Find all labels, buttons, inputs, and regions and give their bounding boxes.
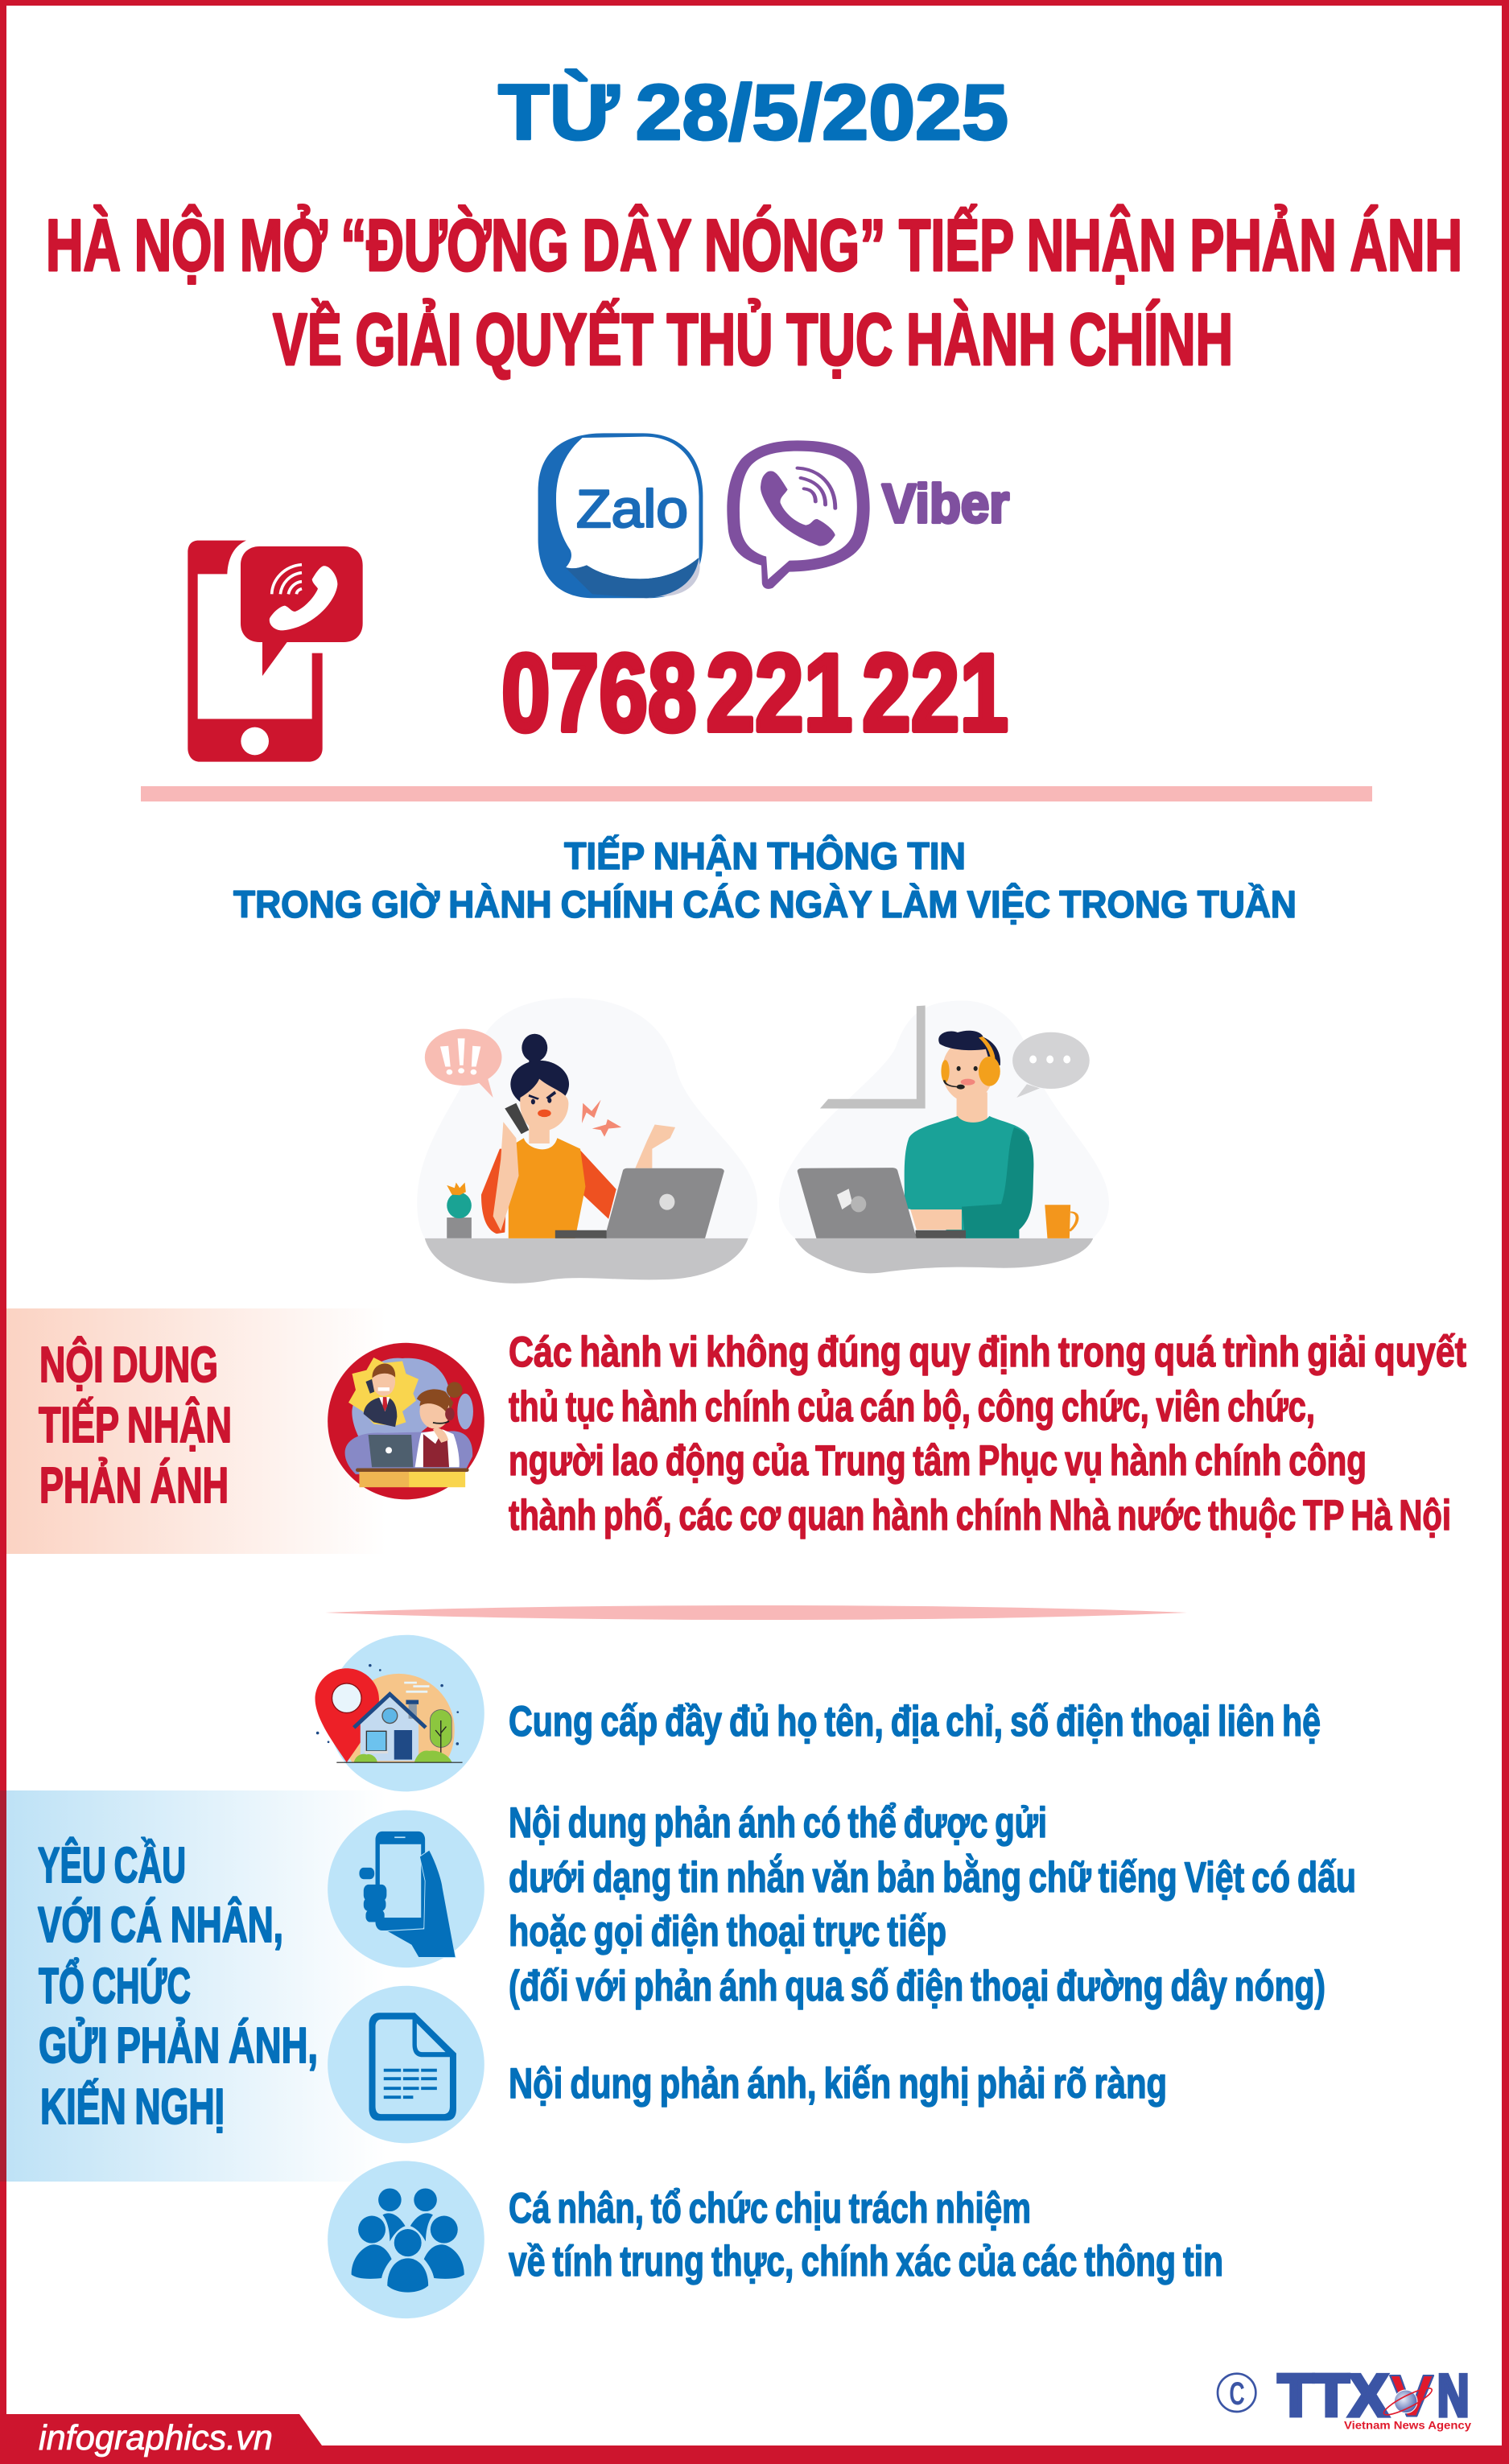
- logo: TTXVN: [1218, 2363, 1471, 2431]
- site name: infographics.vn: [39, 2418, 273, 2458]
- heading: TỔ CHỨC: [39, 1958, 191, 2014]
- logo: TTXVN: N: [1437, 2363, 1469, 2429]
- text: hình thức gửi: [509, 1799, 1356, 2010]
- subtitle: TRONG GIỜ HÀNH CHÍNH CÁC NGÀY LÀM VIỆC TRONG TUẦN: [233, 883, 1297, 925]
- footer band with site tab: [0, 2414, 1509, 2464]
- panel background: [6, 1790, 386, 2182]
- logo: TTXVN: Vietnam News Agency: [1344, 2418, 1471, 2431]
- main title: [46, 204, 1462, 381]
- heading: GỬI PHẢN ÁNH,: [39, 2018, 318, 2074]
- text: rõ ràng: Nội dung phản ánh, kiến nghị phải rõ ràng: [509, 2060, 1167, 2108]
- copyright mark: [1218, 2374, 1255, 2412]
- text: nội dung: [509, 1329, 1466, 1539]
- text: trách nhiệm: [509, 2185, 1223, 2285]
- icon: Zalo logo: Zalo: [576, 479, 688, 538]
- copyright mark: C: [1229, 2376, 1245, 2412]
- pink divider bar: [141, 786, 1372, 801]
- panel: nội dung tiếp nhận phản ánh: [6, 1308, 1466, 1554]
- hotline number: 0768 221 221: [501, 632, 1008, 755]
- heading: PHẢN ÁNH: [39, 1458, 229, 1514]
- heading: [39, 1337, 232, 1514]
- heading: YÊU CẦU: [38, 1838, 186, 1893]
- illustration: operator with headset: [779, 1001, 1109, 1273]
- panel: yêu cầu: [0, 1635, 1356, 2318]
- icon: house with location pin: [315, 1635, 484, 1791]
- icon: group of people: [328, 2161, 484, 2318]
- heading: NỘI DUNG: [39, 1337, 218, 1393]
- pink tapered divider: [325, 1605, 1187, 1620]
- icon: Viber logo: [727, 440, 1009, 589]
- heading: TIẾP NHẬN: [39, 1398, 232, 1453]
- logo: TTXVN: TTX: [1278, 2363, 1388, 2429]
- title date: TỪ 28/5/2025: [498, 68, 1008, 156]
- heading: KIẾN NGHỊ: [40, 2079, 225, 2135]
- icon: Viber logo: Viber: [882, 473, 1009, 534]
- heading: [38, 1838, 318, 2135]
- illustration: customer calling and operator: [417, 998, 1109, 1284]
- subtitle: [233, 834, 1297, 925]
- text: trách nhiệm: về tính trung thực, chính xác của các thông tin: [509, 2238, 1223, 2285]
- panel background: [6, 1308, 386, 1554]
- logo: TTXVN: V: [1390, 2363, 1434, 2429]
- icon: document: [328, 1986, 484, 2143]
- text: trách nhiệm: Cá nhân, tổ chức chịu trách nhiệm: [509, 2185, 1031, 2232]
- heading: VỚI CÁ NHÂN,: [38, 1897, 283, 1953]
- icon: Zalo logo: [538, 433, 703, 598]
- icon: hand holding phone: [328, 1810, 484, 1967]
- text: hình thức gửi: hoặc gọi điện thoại trực tiếp: [509, 1908, 946, 1955]
- illustration: angry woman on phone: [417, 998, 757, 1284]
- text: hình thức gửi: Nội dung phản ánh có thể được gửi: [509, 1799, 1047, 1847]
- icon: phone with call bubble: [188, 541, 363, 762]
- icon: complaint call: [328, 1343, 484, 1499]
- subtitle: TIẾP NHẬN THÔNG TIN: [564, 834, 966, 877]
